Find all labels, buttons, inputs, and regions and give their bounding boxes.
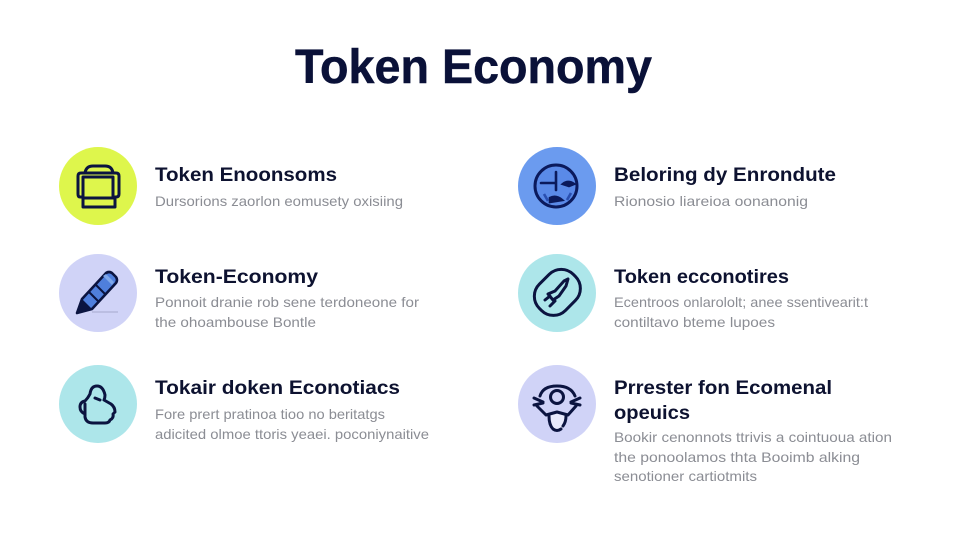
description: the ohoambouse Bontle: [155, 314, 316, 330]
heading: Token-Economy: [155, 266, 318, 288]
title: Token Economy: [295, 41, 652, 94]
description: Ponnoit dranie rob sene terdoneone for: [155, 294, 419, 310]
description: Ecentroos onlarololt; anee ssentivearit:t: [614, 294, 868, 310]
icon: lavender circle with ring figure: [518, 365, 596, 443]
description: adicited olmoe ttoris yeaei. poconiynaitive: [155, 426, 429, 442]
panel: top left item: [59, 147, 403, 225]
description: Fore prert pratinoa tioo no beritatgs: [155, 406, 385, 422]
heading: [614, 377, 832, 424]
heading: Prrester fon Ecomenal: [614, 377, 832, 399]
description: [614, 429, 892, 484]
description: Dursorions zaorlon eomusety oxisiing: [155, 193, 403, 209]
icon: yellow circle with box: [59, 147, 137, 225]
description: senotioner cartiotmits: [614, 468, 757, 484]
icon: aqua circle with hand shape: [59, 365, 137, 443]
panel: top right item: [518, 147, 836, 225]
panel: middle left item: [59, 254, 419, 332]
icon: aqua circle with capsule: [518, 254, 596, 332]
panel: bottom left item: [59, 365, 429, 443]
heading: Token Enoonsoms: [155, 164, 337, 186]
panel: middle right item: [518, 254, 868, 332]
description: the ponoolamos thta Booimb alking: [614, 449, 860, 465]
panel: bottom right item: [518, 365, 892, 484]
description: [155, 294, 419, 330]
icon: lavender circle with pencil: [59, 254, 137, 332]
heading: Beloring dy Enrondute: [614, 164, 836, 186]
description: Bookir cenonnots ttrivis a cointuoua ation: [614, 429, 892, 445]
icon: blue circle with dial: [518, 147, 596, 225]
heading: Tokair doken Econotiacs: [155, 377, 400, 399]
heading: opeuics: [614, 402, 690, 424]
description: [614, 294, 868, 330]
description: [155, 406, 429, 442]
heading: Token ecconotires: [614, 266, 789, 288]
description: contiltavo bteme lupoes: [614, 314, 775, 330]
description: Rionosio liareioa oonanonig: [614, 193, 808, 209]
